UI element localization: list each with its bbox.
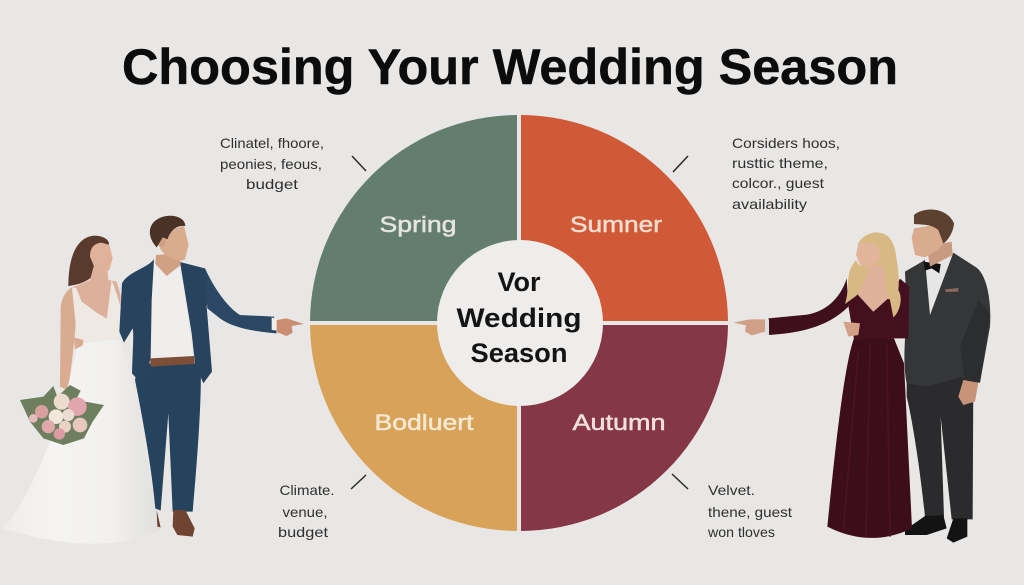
text block: bodluert notes: venue, <box>282 504 328 520</box>
text block: summer notes <box>732 135 840 212</box>
segment: Autumn <box>521 325 728 531</box>
text block: autumn notes: won tloves <box>707 524 775 540</box>
bride <box>2 236 161 544</box>
text block: spring notes <box>220 135 324 192</box>
segment: Spring <box>310 115 517 321</box>
center circle: Vor <box>497 267 541 297</box>
text block: bodluert notes <box>278 482 334 540</box>
groom <box>119 216 304 537</box>
bouquet <box>20 385 104 445</box>
tick: bodluert <box>351 475 366 489</box>
center circle <box>437 240 603 406</box>
text block: spring notes: Clinatel, fhoore, <box>220 135 324 151</box>
right couple illustration <box>733 210 990 543</box>
text block: autumn notes: thene, guest <box>708 504 792 520</box>
segment: Summer: Sumner <box>570 212 662 237</box>
center circle: Season <box>470 338 568 368</box>
segment: Autumn: Autumn <box>572 410 666 435</box>
text block: autumn notes <box>707 482 792 540</box>
text block: bodluert notes: budget <box>278 524 328 540</box>
tick: summer <box>673 156 688 172</box>
tick: autumn <box>672 474 688 489</box>
text block: summer notes: rusttic theme, <box>732 155 828 171</box>
man in tuxedo <box>904 210 990 543</box>
left couple illustration <box>2 216 304 544</box>
segment: Spring: Spring <box>380 212 456 237</box>
text block: bodluert notes: Climate. <box>280 482 334 498</box>
season wheel <box>310 115 728 531</box>
text block: autumn notes: Velvet. <box>708 482 755 498</box>
title: Choosing Your Wedding Season <box>122 39 898 95</box>
text block: spring notes: budget <box>246 176 298 192</box>
center circle: Wedding <box>456 303 582 333</box>
segment: Bodluert <box>310 325 517 531</box>
segment: Summer <box>521 115 728 321</box>
tick: spring <box>352 156 366 171</box>
woman in velvet dress <box>733 232 912 538</box>
text block: summer notes: Corsiders hoos, <box>732 135 840 151</box>
text block: summer notes: colcor., guest <box>732 175 824 191</box>
segment: Bodluert: Bodluert <box>374 410 474 435</box>
text block: summer notes: availability <box>732 196 807 212</box>
text block: spring notes: peonies, feous, <box>220 156 322 172</box>
